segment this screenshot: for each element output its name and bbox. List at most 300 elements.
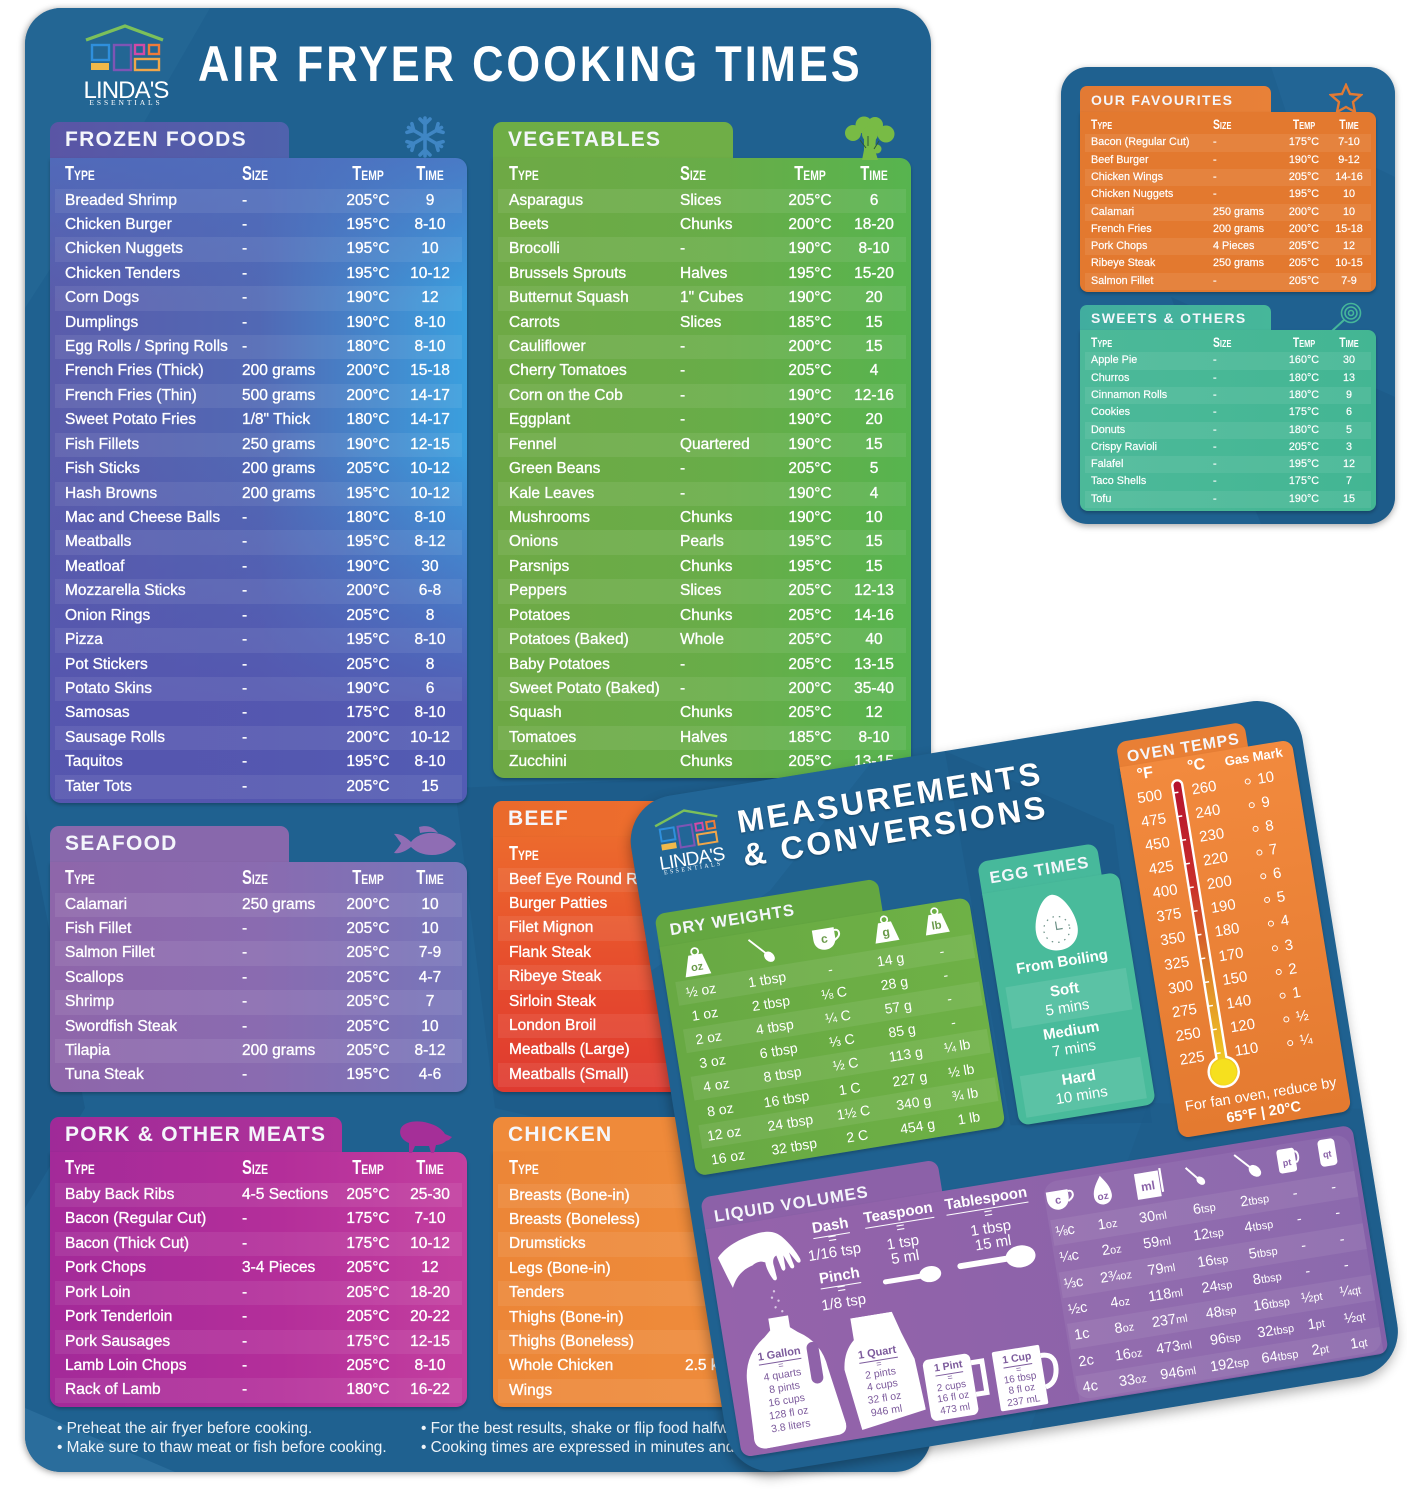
column headers: Time bbox=[860, 163, 888, 185]
frozen foods rows: - bbox=[242, 582, 247, 599]
pork rows: Pork Loin bbox=[65, 1284, 130, 1301]
vegetables rows: 35-40 bbox=[854, 680, 894, 697]
favourites rows: 250 grams bbox=[1213, 257, 1264, 269]
chicken rows: 2.5 kg bbox=[685, 1357, 727, 1374]
frozen foods rows: - bbox=[242, 631, 247, 648]
dry weights table: 16 oz bbox=[710, 1146, 746, 1167]
sweets rows: 5 bbox=[1346, 424, 1352, 436]
footnotes right bbox=[421, 1420, 745, 1456]
beef rows: Sirloin Steak bbox=[509, 993, 596, 1010]
liquid conversion table: ½qt bbox=[1343, 1309, 1367, 1327]
main card: air fryer cooking times bbox=[25, 8, 931, 1472]
vegetables rows: Chunks bbox=[680, 216, 733, 233]
vegetables rows: 205°C bbox=[788, 631, 832, 648]
vegetables rows: Pearls bbox=[680, 533, 724, 550]
frozen foods rows: Hash Browns bbox=[65, 485, 157, 502]
small card: favourites and sweets bbox=[1061, 67, 1395, 524]
frozen foods rows: - bbox=[242, 240, 247, 257]
liquid conversion table: ⅛c bbox=[1055, 1222, 1076, 1241]
column headers: Type bbox=[65, 1157, 95, 1179]
favourites rows: 200°C bbox=[1289, 223, 1319, 235]
column headers: Size bbox=[242, 867, 268, 889]
oven scale labels: °F bbox=[1136, 764, 1155, 784]
sweets rows: 13 bbox=[1343, 372, 1355, 384]
favourites rows: 10 bbox=[1343, 206, 1355, 218]
frozen foods rows: 195°C bbox=[346, 485, 390, 502]
vegetables rows: Slices bbox=[680, 192, 721, 208]
favourites rows: Calamari bbox=[1091, 206, 1134, 218]
dry weights table: 1 lb bbox=[957, 1108, 982, 1127]
chicken rows: Breasts (Bone-in) bbox=[509, 1186, 630, 1204]
oven scale labels: 500 bbox=[1136, 786, 1164, 807]
cup mug: 237 mL bbox=[1007, 1393, 1041, 1409]
frozen foods rows: - bbox=[242, 314, 247, 331]
dry weights table: 32 tbsp bbox=[770, 1134, 818, 1158]
seafood rows: - bbox=[242, 1066, 247, 1083]
gallon jug: 8 pints bbox=[769, 1379, 801, 1396]
text: tablespoon: Tablespoon bbox=[944, 1184, 1029, 1214]
liquid conversion table: 16oz bbox=[1114, 1346, 1144, 1364]
icon: oz weight: oz bbox=[691, 960, 705, 974]
oven scale labels: 180 bbox=[1214, 920, 1241, 941]
sweets rows: - bbox=[1213, 372, 1217, 384]
oven scale labels: 300 bbox=[1167, 976, 1195, 997]
liquid conversion table: 1oz bbox=[1097, 1217, 1119, 1234]
heading: vegetables bbox=[493, 122, 733, 159]
logo: Linda's Essentials: ESSENTIALS bbox=[664, 861, 724, 876]
frozen foods rows: 8-10 bbox=[414, 753, 446, 770]
vegetables rows: 190°C bbox=[788, 289, 832, 306]
oven scale labels: 425 bbox=[1148, 858, 1175, 878]
dry weights table: 227 g bbox=[892, 1068, 929, 1089]
liquid conversion table: 96tsp bbox=[1209, 1330, 1242, 1349]
seafood rows: 10 bbox=[421, 896, 439, 912]
panel: beef bbox=[492, 801, 671, 1095]
vegetables rows: 40 bbox=[865, 631, 883, 648]
gallon jug: 1 Gallon 4 quarts bbox=[757, 1345, 803, 1384]
seafood rows: 10 bbox=[421, 1018, 439, 1035]
frozen foods rows: Sausage Rolls bbox=[65, 729, 165, 746]
pork rows: Pork Tenderloin bbox=[65, 1308, 172, 1325]
dry weights table: ½ oz bbox=[685, 980, 718, 1000]
frozen foods rows: - bbox=[242, 192, 247, 208]
vegetables rows: Halves bbox=[680, 265, 727, 282]
column headers: Time bbox=[416, 163, 444, 185]
footnotes left: • Make sure to thaw meat or fish before cooking. bbox=[57, 1439, 387, 1456]
liquid conversion table: 1pt bbox=[1307, 1316, 1326, 1333]
favourites rows: Ribeye Steak bbox=[1091, 257, 1155, 269]
quart bottle: 4 cups bbox=[867, 1377, 899, 1394]
favourites rows: 7-9 bbox=[1341, 275, 1357, 287]
frozen foods rows: 205°C bbox=[346, 656, 390, 673]
vegetables rows: 8-10 bbox=[858, 729, 890, 746]
dry weights table: 8 tbsp bbox=[763, 1064, 803, 1086]
pork rows: 10-12 bbox=[410, 1235, 450, 1252]
chicken rows: Legs (Bone-in) bbox=[509, 1260, 611, 1277]
column headers: Time bbox=[1339, 334, 1359, 350]
note: fan oven: 65°F | 20°C bbox=[1226, 1099, 1303, 1127]
vegetables rows: 15 bbox=[865, 558, 883, 575]
sweets rows: 180°C bbox=[1289, 372, 1319, 384]
favourites rows: - bbox=[1213, 188, 1217, 200]
dry weights table: 57 g bbox=[884, 997, 913, 1017]
pork rows: - bbox=[242, 1333, 247, 1350]
icon: teaspoon bbox=[880, 1260, 945, 1294]
heading: our favourites: OUR FAVOURITES bbox=[1091, 92, 1233, 108]
column headers: Type bbox=[509, 163, 539, 185]
column headers: Temp bbox=[352, 867, 384, 889]
vegetables rows: 1" Cubes bbox=[680, 289, 743, 306]
liquid conversion table: 48tsp bbox=[1205, 1304, 1238, 1323]
vegetables rows: - bbox=[680, 387, 685, 404]
column headers: Type bbox=[1091, 116, 1112, 132]
vegetables rows: 13-15 bbox=[854, 656, 894, 673]
sweets rows: 205°C bbox=[1289, 441, 1319, 453]
frozen foods rows: 9 bbox=[426, 192, 434, 208]
oven scale labels: Gas Mark bbox=[1224, 745, 1284, 769]
oven scale labels: 475 bbox=[1140, 810, 1168, 831]
pork rows: - bbox=[242, 1284, 247, 1301]
favourites rows: Bacon (Regular Cut) bbox=[1091, 136, 1189, 148]
column headers bbox=[1091, 116, 1359, 132]
seafood rows: - bbox=[242, 920, 247, 937]
panel: seafood bbox=[49, 826, 468, 1095]
vegetables rows: - bbox=[680, 338, 685, 355]
pork table body bbox=[50, 1152, 467, 1407]
frozen foods rows: 190°C bbox=[346, 558, 390, 575]
frozen foods rows: Mozzarella Sticks bbox=[65, 582, 186, 599]
heading: egg times: EGG TIMES bbox=[989, 854, 1091, 887]
pork rows: - bbox=[242, 1381, 247, 1398]
oven scale labels: 230 bbox=[1198, 825, 1226, 846]
logo: Linda's Essentials: LINDA'S bbox=[658, 844, 726, 875]
liquid conversion table: 24tsp bbox=[1201, 1278, 1234, 1297]
heading: oven temps bbox=[1116, 722, 1250, 778]
beef rows: Meatballs (Small) bbox=[509, 1066, 629, 1083]
vegetables rows: Brocolli bbox=[509, 240, 560, 257]
dry weights table: 4 oz bbox=[702, 1075, 731, 1095]
icon: egg timer bbox=[1030, 890, 1082, 955]
vegetables rows: Peppers bbox=[509, 582, 567, 599]
text: dash: = bbox=[827, 1229, 838, 1248]
oven scale labels: 190 bbox=[1210, 896, 1237, 917]
pork rows: Rack of Lamb bbox=[65, 1381, 161, 1398]
column headers: Type bbox=[65, 163, 95, 185]
gallon jug: 16 cups bbox=[768, 1392, 806, 1410]
sweets rows: Tofu bbox=[1091, 493, 1111, 505]
frozen foods rows: - bbox=[242, 729, 247, 746]
oven scale labels: °C bbox=[1187, 756, 1207, 775]
sweets rows: Churros bbox=[1091, 372, 1129, 384]
icon: cup: c bbox=[820, 931, 829, 946]
vegetables rows: 12 bbox=[865, 704, 883, 721]
vegetables rows: - bbox=[680, 240, 685, 257]
text: teaspoon bbox=[863, 1200, 941, 1270]
vegetables rows: 4 bbox=[870, 362, 878, 379]
favourites rows: - bbox=[1213, 275, 1217, 287]
icon: g weight: g bbox=[882, 925, 891, 940]
vegetables rows: 190°C bbox=[788, 411, 832, 428]
seafood rows: 7 bbox=[426, 993, 434, 1010]
oven scale labels: 250 bbox=[1175, 1024, 1202, 1045]
frozen foods rows: - bbox=[242, 338, 247, 355]
liquid conversion table: 6tsp bbox=[1192, 1201, 1217, 1218]
icon: lb weight bbox=[920, 904, 952, 938]
favourites rows: - bbox=[1213, 136, 1217, 148]
quart bottle: 1 Quart 2 pints bbox=[858, 1344, 898, 1382]
frozen foods rows: 8 bbox=[426, 607, 434, 624]
liquid conversion table: ¼c bbox=[1059, 1248, 1081, 1267]
favourites rows: - bbox=[1213, 171, 1217, 183]
frozen foods rows: 500 grams bbox=[242, 387, 315, 404]
vegetables rows: 12-13 bbox=[854, 582, 894, 599]
frozen foods rows: Fish Fillets bbox=[65, 436, 139, 453]
seafood rows: 4-7 bbox=[419, 969, 441, 986]
pork rows: 25-30 bbox=[410, 1186, 450, 1203]
heading: liquid volumes bbox=[701, 1160, 943, 1233]
favourites rows: 15-18 bbox=[1335, 223, 1363, 235]
frozen foods rows: Chicken Nuggets bbox=[65, 240, 183, 257]
panel: frozen foods bbox=[48, 116, 468, 806]
vegetables rows: 200°C bbox=[788, 216, 832, 233]
oven scale labels: 8 bbox=[1264, 817, 1275, 835]
dry weights table: ¾ lb bbox=[951, 1084, 980, 1104]
frozen foods rows bbox=[55, 189, 462, 799]
pork rows: 7-10 bbox=[414, 1210, 446, 1227]
dry weights table: 12 oz bbox=[706, 1122, 743, 1143]
frozen foods rows: Pot Stickers bbox=[65, 656, 148, 673]
frozen foods rows: - bbox=[242, 778, 247, 795]
pork rows: Bacon (Regular Cut) bbox=[65, 1210, 206, 1227]
quart bottle bbox=[837, 1309, 928, 1431]
sweets rows: 190°C bbox=[1289, 493, 1319, 505]
dry weights table: 113 g bbox=[888, 1044, 924, 1065]
liquid conversion table: 5tbsp bbox=[1248, 1245, 1279, 1263]
sweets rows: - bbox=[1213, 389, 1217, 401]
heading: dry weights bbox=[655, 878, 883, 950]
vegetables rows: Potatoes (Baked) bbox=[509, 631, 629, 648]
seafood rows: 205°C bbox=[346, 993, 390, 1010]
vegetables rows: 15 bbox=[865, 436, 883, 453]
seafood rows: Shrimp bbox=[65, 993, 114, 1010]
pork rows: - bbox=[242, 1357, 247, 1374]
vegetables rows: Chunks bbox=[680, 753, 733, 770]
liquid conversion table: ⅓c bbox=[1063, 1274, 1085, 1292]
seafood rows: 200°C bbox=[346, 896, 390, 912]
vegetables rows: Chunks bbox=[680, 704, 733, 721]
beef rows: Flank Steak bbox=[509, 944, 591, 961]
dry weights table: ⅛ C bbox=[821, 983, 848, 1003]
vegetables rows: 12-16 bbox=[854, 387, 894, 404]
pork rows: 205°C bbox=[346, 1259, 390, 1276]
oven scale labels: ¼ bbox=[1299, 1030, 1314, 1049]
text: teaspoon: 1 tsp bbox=[886, 1232, 921, 1254]
frozen foods rows: - bbox=[242, 680, 247, 697]
seafood rows: 195°C bbox=[346, 1066, 390, 1083]
sweets rows: - bbox=[1213, 475, 1217, 487]
heading: liquid volumes: LIQUID VOLUMES bbox=[713, 1183, 870, 1226]
vegetables rows: Asparagus bbox=[509, 192, 583, 208]
sweets rows: Crispy Ravioli bbox=[1091, 441, 1157, 453]
vegetables rows: 6 bbox=[870, 192, 878, 208]
liquid conversion table bbox=[1051, 1171, 1384, 1402]
beef rows: Filet Mignon bbox=[509, 919, 593, 936]
favourites rows: 205°C bbox=[1289, 240, 1319, 252]
icon: oz weight bbox=[686, 947, 712, 978]
vegetables rows: - bbox=[680, 411, 685, 428]
dry weights table: 24 tbsp bbox=[767, 1111, 815, 1134]
dry weights table: 454 g bbox=[899, 1115, 936, 1137]
oven scale labels: 350 bbox=[1159, 929, 1187, 949]
dry weights table: ½ lb bbox=[947, 1060, 976, 1080]
dry weights table: ¼ C bbox=[824, 1007, 852, 1027]
text: dash: 1/16 tsp bbox=[807, 1239, 863, 1265]
vegetables rows: 195°C bbox=[788, 558, 832, 575]
seafood rows: 200 grams bbox=[242, 1042, 315, 1059]
heading: beef bbox=[493, 801, 733, 838]
frozen foods rows: 1/8" Thick bbox=[242, 411, 310, 428]
seafood rows: 8-12 bbox=[414, 1042, 446, 1059]
vegetables rows: 18-20 bbox=[854, 216, 894, 233]
pork rows: 4-5 Sections bbox=[242, 1186, 328, 1203]
pork rows: - bbox=[242, 1210, 247, 1227]
pork rows: 205°C bbox=[346, 1357, 390, 1374]
title: AIR FRYER COOKING TIMES bbox=[198, 36, 863, 92]
frozen foods rows: Fish Sticks bbox=[65, 460, 140, 477]
text: teaspoon: Teaspoon bbox=[863, 1199, 934, 1227]
medium eggs: 7 mins bbox=[1051, 1037, 1098, 1061]
vegetables rows: Chunks bbox=[680, 607, 733, 624]
frozen foods rows: 205°C bbox=[346, 192, 390, 208]
favourites rows: 9-12 bbox=[1338, 154, 1360, 166]
vegetables rows: Fennel bbox=[509, 436, 556, 453]
heading: sweets and others: SWEETS & OTHERS bbox=[1091, 310, 1247, 326]
seafood rows: 205°C bbox=[346, 1018, 390, 1035]
heading: oven temps: OVEN TEMPS bbox=[1126, 731, 1241, 766]
quart bottle: 946 ml bbox=[870, 1402, 903, 1419]
heading: vegetables: VEGETABLES bbox=[508, 128, 661, 151]
frozen foods rows: 6-8 bbox=[419, 582, 441, 599]
vegetables rows: 190°C bbox=[788, 485, 832, 502]
frozen foods rows: Sweet Potato Fries bbox=[65, 411, 196, 428]
pork rows: 16-22 bbox=[410, 1381, 450, 1398]
icon: cup bbox=[812, 927, 840, 950]
oven scale labels: 325 bbox=[1163, 953, 1191, 974]
frozen foods rows: - bbox=[242, 509, 247, 526]
seafood rows: Fish Fillet bbox=[65, 920, 131, 937]
frozen foods rows: 180°C bbox=[346, 411, 390, 428]
column headers: Type bbox=[1091, 334, 1112, 350]
frozen foods rows: 190°C bbox=[346, 680, 390, 697]
text: dash bbox=[803, 1215, 862, 1263]
sweets rows: - bbox=[1213, 354, 1217, 366]
liquid conversion table: 946ml bbox=[1160, 1364, 1197, 1383]
frozen foods rows: - bbox=[242, 558, 247, 575]
frozen foods rows: 200 grams bbox=[242, 485, 315, 502]
liquid conversion table: ½pt bbox=[1301, 1290, 1324, 1307]
icon: pig bbox=[400, 1121, 452, 1153]
vegetables rows: 205°C bbox=[788, 460, 832, 477]
seafood rows: 205°C bbox=[346, 1042, 390, 1059]
vegetables rows: Baby Potatoes bbox=[509, 656, 610, 673]
oven scale labels: 10 bbox=[1257, 768, 1276, 788]
sweets rows: Cinnamon Rolls bbox=[1091, 389, 1167, 401]
favourites rows: 195°C bbox=[1289, 188, 1319, 200]
oven scale labels: 260 bbox=[1191, 778, 1218, 798]
sweets rows: Falafel bbox=[1091, 458, 1123, 470]
thermometer bbox=[1156, 773, 1248, 1096]
frozen foods rows: - bbox=[242, 704, 247, 721]
oven scale labels: 275 bbox=[1171, 1000, 1199, 1021]
text: pinch: 1/8 tsp bbox=[820, 1290, 868, 1314]
vegetables rows: 190°C bbox=[788, 240, 832, 257]
liquid conversion table: 118ml bbox=[1148, 1286, 1184, 1305]
note: fan oven: For fan oven, reduce by bbox=[1184, 1075, 1338, 1115]
frozen foods rows: 200°C bbox=[346, 729, 390, 746]
panel: chicken bbox=[492, 1117, 727, 1410]
liquid conversion table: 2¾oz bbox=[1099, 1268, 1133, 1287]
oven scale labels: 6 bbox=[1272, 864, 1283, 883]
frozen foods rows: 250 grams bbox=[242, 436, 315, 453]
liquid table icons: pt bbox=[1282, 1157, 1292, 1168]
chicken rows bbox=[498, 1184, 727, 1403]
frozen foods rows: 195°C bbox=[346, 240, 390, 257]
sweets rows: 30 bbox=[1343, 354, 1355, 366]
favourites rows: 14-16 bbox=[1335, 171, 1363, 183]
vegetables rows: 4 bbox=[870, 485, 878, 502]
favourites rows: 250 grams bbox=[1213, 206, 1264, 218]
sweets rows: - bbox=[1213, 424, 1217, 436]
liquid conversion table: 16tbsp bbox=[1252, 1296, 1291, 1315]
frozen foods rows: Corn Dogs bbox=[65, 289, 139, 306]
favourites rows: 10 bbox=[1343, 188, 1355, 200]
vegetables rows: 20 bbox=[865, 289, 883, 306]
vegetables rows: Beets bbox=[509, 216, 549, 233]
medium eggs bbox=[1042, 1018, 1104, 1063]
dry weights table: ½ C bbox=[832, 1054, 860, 1074]
pint mug: 16 fl oz bbox=[937, 1389, 970, 1406]
dry weights table: 340 g bbox=[895, 1091, 933, 1113]
chicken rows: Drumsticks bbox=[509, 1235, 586, 1252]
liquid conversion table: 33oz bbox=[1118, 1372, 1148, 1390]
frozen foods rows: 8-10 bbox=[414, 216, 446, 233]
panel: our favourites bbox=[1079, 83, 1378, 295]
pint mug: 1 Pint 2 cups bbox=[934, 1358, 967, 1394]
vegetables rows: 15 bbox=[865, 533, 883, 550]
liquid conversion table: 1qt bbox=[1349, 1336, 1369, 1353]
chicken rows: Breasts (Boneless) bbox=[509, 1211, 640, 1228]
text: tablespoon: = bbox=[983, 1204, 994, 1223]
favourites rows: 190°C bbox=[1289, 154, 1319, 166]
liquid conversion table: 4oz bbox=[1110, 1295, 1131, 1312]
frozen foods rows: 10-12 bbox=[410, 485, 450, 502]
dry weights table: - bbox=[827, 961, 834, 977]
medium eggs: Medium bbox=[1042, 1018, 1101, 1044]
frozen foods rows: French Fries (Thick) bbox=[65, 362, 204, 379]
frozen foods rows: 30 bbox=[421, 558, 439, 575]
chicken rows: Thighs (Boneless) bbox=[509, 1333, 634, 1350]
text: tablespoon: 1 tbsp bbox=[970, 1217, 1013, 1240]
oven scale labels: 240 bbox=[1195, 801, 1222, 822]
heading: beef: BEEF bbox=[508, 807, 569, 830]
vegetables rows: 205°C bbox=[788, 362, 832, 379]
frozen foods rows: Dumplings bbox=[65, 314, 138, 331]
sweets rows: 6 bbox=[1346, 406, 1352, 418]
favourites rows: Chicken Wings bbox=[1091, 171, 1163, 183]
sweets rows: Taco Shells bbox=[1091, 475, 1146, 487]
vegetables rows: Halves bbox=[680, 729, 727, 746]
liquid conversion table: - bbox=[1343, 1257, 1350, 1274]
